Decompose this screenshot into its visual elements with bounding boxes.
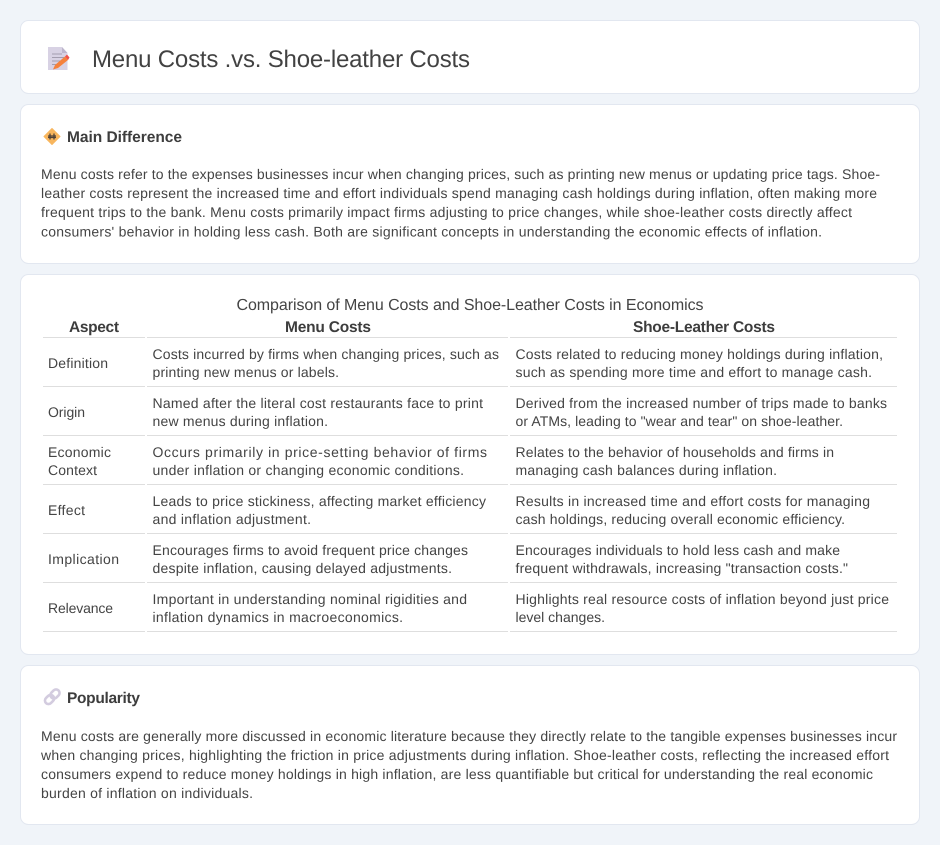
row: relevance	[43, 591, 897, 632]
text block: main difference	[41, 166, 880, 240]
table header row: Menu Costs	[285, 319, 371, 336]
row: implication	[43, 542, 897, 582]
row: definition: such as spending more time and effort to manage cash.	[516, 364, 872, 380]
row: definition: printing new menus or labels.	[152, 364, 339, 380]
text block: popularity	[40, 728, 897, 801]
row: implication: despite inflation, causing delayed adjustments.	[152, 560, 452, 576]
icon: document with pencil	[48, 47, 70, 70]
row: economic context: managing cash balances during inflation.	[516, 462, 777, 478]
row: economic context: Context	[48, 462, 97, 478]
row: relevance: Important in understanding nominal rigidities and	[152, 591, 467, 607]
row: economic context: Economic	[48, 444, 111, 460]
panel: comparison table	[20, 274, 920, 654]
text block: popularity: Menu costs are generally more discussed in economic literature because they directly relate to the tangible expenses businesses incur	[41, 728, 897, 744]
row: implication: Encourages individuals to hold less cash and make	[516, 542, 840, 558]
row: implication: Encourages firms to avoid frequent price changes	[152, 542, 468, 558]
row: economic context: Relates to the behavior of households and firms in	[516, 444, 834, 460]
panel: title card	[20, 20, 920, 94]
row: origin: Origin	[48, 404, 85, 420]
row: origin: Named after the literal cost restaurants face to print	[152, 395, 483, 411]
row: definition: Costs related to reducing money holdings during inflation,	[516, 346, 883, 362]
text block: main difference: consumers' behavior in holding less cash. Both are significant concepts in understanding the economic effects of inflation.	[41, 224, 822, 240]
row: economic context: under inflation or changing economic conditions.	[152, 462, 464, 478]
row: definition: Costs incurred by firms when changing prices, such as	[152, 346, 499, 362]
row: origin: or ATMs, leading to "wear and tear" on shoe-leather.	[516, 413, 843, 429]
row: effect	[43, 493, 897, 534]
text block: main difference: frequent trips to the bank. Menu costs primarily impact firms adjusting to price changes, while shoe-leather costs directly affect	[41, 204, 852, 220]
table header row	[43, 319, 897, 338]
text block: main difference: Menu costs refer to the expenses businesses incur when changing prices, such as printing new menus or updating price tags. Shoe-	[41, 166, 880, 182]
row: effect: Effect	[48, 502, 85, 518]
row: origin	[43, 395, 897, 436]
row: effect: cash holdings, reducing overall economic efficiency.	[516, 511, 845, 527]
panel: popularity	[20, 666, 920, 824]
icon: warning diamond	[44, 128, 60, 144]
text block: popularity: burden of inflation on individuals.	[41, 785, 253, 801]
panel: main difference	[20, 104, 920, 264]
icon: chain link	[43, 688, 61, 706]
title: Menu Costs .vs. Shoe-leather Costs	[92, 46, 470, 73]
row: implication: Implication	[48, 551, 119, 567]
table header row: Shoe-Leather Costs	[633, 319, 775, 336]
row: definition	[43, 346, 897, 386]
row: definition: Definition	[48, 355, 108, 371]
row: effect: Results in increased time and effort costs for managing	[516, 493, 870, 509]
text block: popularity: when changing prices, highlighting the friction in price adjustments during inflation. Shoe-leather costs, reflecting the increased effort	[40, 747, 889, 763]
row: relevance: Relevance	[48, 600, 113, 616]
heading: popularity: Popularity	[67, 690, 140, 707]
row: economic context	[43, 444, 897, 484]
row: relevance: inflation dynamics in macroeconomics.	[152, 609, 403, 625]
row: origin: Derived from the increased number of trips made to banks	[516, 395, 887, 411]
row: relevance: Highlights real resource costs of inflation beyond just price	[516, 591, 889, 607]
table caption: Comparison of Menu Costs and Shoe-Leather Costs in Economics	[236, 297, 704, 314]
text block: popularity: consumers expend to reduce money holdings in high inflation, are less quantifiable but critical for understanding the real economic	[41, 766, 873, 782]
row: origin: new menus during inflation.	[152, 413, 328, 429]
row: implication: frequent withdrawals, increasing "transaction costs."	[516, 560, 848, 576]
row: effect: and inflation adjustment.	[152, 511, 311, 527]
heading: main difference: Main Difference	[67, 129, 182, 146]
text block: main difference: leather costs represent the increased time and effort individuals spend managing cash holdings during inflation, often making more	[41, 185, 877, 201]
table header row: Aspect	[69, 319, 119, 336]
row: relevance: level changes.	[516, 609, 605, 625]
row: economic context: Occurs primarily in price-setting behavior of firms	[152, 444, 487, 460]
row: effect: Leads to price stickiness, affecting market efficiency	[152, 493, 486, 509]
